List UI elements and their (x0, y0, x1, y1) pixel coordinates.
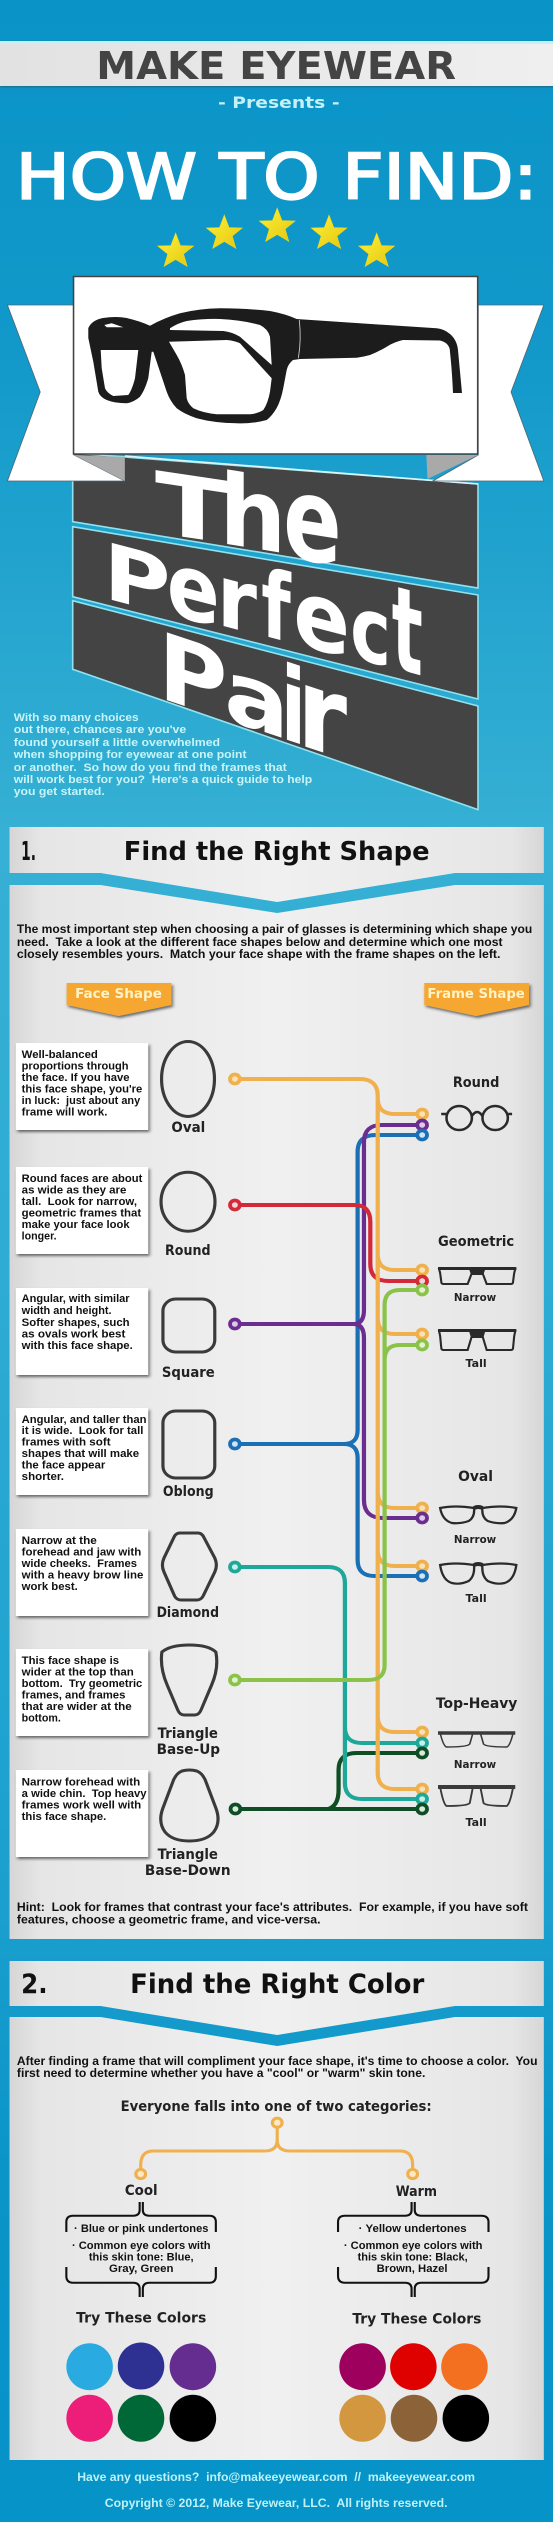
card: diamond description: forehead and jaw with (22, 1547, 141, 1558)
intro text: shape: closely resembles yours. Match your face shape with the frame shapes on the left. (17, 947, 500, 961)
card: triangle base-up description: wider at the top than (21, 1667, 134, 1678)
text: Perfect: t (392, 560, 423, 704)
face shape labels: Oval (171, 1120, 205, 1136)
card: diamond description: with a heavy brow line (21, 1570, 143, 1581)
card: diamond description (16, 1529, 148, 1616)
card: triangle base-up description: bottom. Try geometric (22, 1678, 142, 1690)
connector lines between faces and frames (235, 1079, 422, 1809)
banner: frame shape: Frame Shape (427, 986, 525, 1002)
intro paragraph: you get started. (14, 784, 105, 798)
card: round description: make your face look (22, 1219, 130, 1231)
heading: two categories: Everyone falls into one of two categories: (121, 2099, 432, 2115)
banner: face shape (67, 983, 171, 1016)
text: cool attributes: this skin tone: Blue, (89, 2252, 194, 2263)
text: Perfect: e (167, 530, 220, 649)
panel: find the right shape (10, 885, 544, 1939)
icon: top-heavy tall frames (438, 1787, 515, 1806)
heading: try these colors, cool: Try These Colors (76, 2311, 206, 2327)
card: oblong description: Angular, and taller than (22, 1414, 147, 1426)
face shape labels (145, 1120, 231, 1879)
card: triangle base-up description: bottom. (22, 1713, 61, 1724)
card: oblong description: shapes that will make (22, 1448, 139, 1460)
icon: oval tall frames (440, 1564, 516, 1584)
card: oblong description: the face appear (22, 1460, 106, 1471)
card: oblong description: shorter. (22, 1471, 64, 1483)
intro text: color: After finding a frame that will compliment your face shape, it's time to choose a color. You (17, 2054, 537, 2068)
text: Perfect: c (350, 573, 391, 690)
card: oval description: proportions through (22, 1061, 129, 1072)
card: oval description: the face. If you have (22, 1072, 130, 1084)
text: Pair: i (281, 642, 306, 771)
frame shape labels: Tall (466, 1592, 487, 1605)
text: Pair: a (224, 638, 289, 761)
card: oblong description: frames with soft (22, 1437, 111, 1448)
icon: oval narrow frames (440, 1506, 516, 1523)
brace: warm (338, 2202, 488, 2297)
text: warm attributes: Brown, Hazel (377, 2263, 448, 2275)
title: How to find: HOW TO FIND: (16, 142, 537, 214)
card: triangle base-down description: a wide chin. Top heavy (22, 1788, 147, 1800)
swatches: warm colors (339, 2343, 489, 2442)
card: square description (16, 1288, 148, 1375)
icon: diamond face (162, 1533, 216, 1600)
card: triangle base-up description: frames, and frames (22, 1690, 125, 1701)
card: square description: as ovals work best (22, 1329, 126, 1340)
icon: geometric tall frames (438, 1330, 516, 1350)
frame shape labels: Round (453, 1075, 499, 1091)
card: round description: longer. (22, 1231, 57, 1242)
text: Perfect: r (217, 544, 258, 656)
icon: round face (161, 1172, 215, 1231)
frame shape labels: Oval (458, 1469, 493, 1485)
face shape labels: Triangle (158, 1847, 218, 1863)
card: diamond description: Narrow at the (22, 1535, 97, 1547)
text: warm attributes: · Common eye colors with (344, 2240, 483, 2252)
card: round description: Round faces are about (22, 1173, 143, 1185)
section 1 header (10, 827, 544, 902)
label: warm: Warm (396, 2184, 437, 2200)
frame shape labels: Top-Heavy (436, 1696, 518, 1712)
card: oblong description: it is wide. Look for tall (22, 1425, 143, 1437)
icon: oblong face (163, 1411, 215, 1478)
card: oblong description (16, 1408, 148, 1495)
card: round description: geometric frames that (22, 1208, 141, 1219)
intro text: shape: need. Take a look at the different face shapes below and determine which one most (17, 935, 503, 949)
card: round description (16, 1167, 148, 1254)
connector: categories split (136, 2118, 417, 2179)
card: square description: with this face shape. (21, 1340, 133, 1352)
ribbon behind glasses (7, 305, 544, 481)
text: cool attributes: · Common eye colors with (72, 2240, 211, 2252)
header band: Make Eyewear (0, 41, 553, 89)
banner: face shape: Face Shape (75, 986, 162, 1002)
intro text: shape (17, 922, 532, 961)
card: triangle base-down description: this face shape. (22, 1811, 106, 1823)
panel: find the right color (10, 2017, 544, 2460)
text: Pair: r (297, 639, 347, 787)
text: warm attributes: · Yellow undertones (359, 2223, 467, 2235)
frame shape labels: Tall (466, 1357, 487, 1370)
card: triangle base-up description: This face shape is (22, 1655, 119, 1667)
face shape labels: Diamond (157, 1605, 219, 1621)
icon: geometric narrow frames (438, 1268, 516, 1284)
text: Pair: P (158, 611, 227, 742)
section 2 header (10, 1961, 544, 2035)
icon: black eyeglasses (88, 308, 462, 423)
card: triangle base-up description (16, 1649, 148, 1736)
text: The: h (219, 452, 286, 577)
brace: cool (66, 2202, 216, 2297)
header band: Make Eyewear: MAKE EYEWEAR (96, 45, 456, 89)
card: triangle base-down description (16, 1770, 148, 1857)
icon: top-heavy narrow frames (438, 1733, 515, 1747)
text: cool attributes (72, 2223, 211, 2275)
card: square description: width and height. (21, 1305, 112, 1317)
card: diamond description: wide cheeks. Frames (21, 1558, 137, 1570)
card: triangle base-up description: that are wider at the (22, 1701, 132, 1713)
text: warm attributes: this skin tone: Black, (358, 2252, 468, 2263)
card: round description: as wide as they are (22, 1185, 126, 1196)
section 2 header: 2. (21, 1968, 48, 2000)
icon: triangle base-up face (161, 1645, 217, 1715)
text: Pair (158, 611, 347, 787)
intro paragraph (13, 710, 312, 798)
icon: five stars (158, 208, 395, 266)
card: oval description: this face shape, you're (22, 1084, 142, 1095)
card: oval description: in luck: just about any (22, 1095, 141, 1107)
frame shape labels: Narrow (454, 1291, 496, 1304)
frame shape labels: Narrow (454, 1533, 496, 1546)
hint text: features, choose a geometric frame, and vice-versa. (17, 1913, 321, 1926)
frame shape labels: Geometric (438, 1234, 514, 1250)
icon: triangle base-down face (161, 1770, 218, 1841)
swatches: cool colors (66, 2342, 216, 2442)
hint text: Hint: Look for frames that contrast your face's attributes. For example, if you have soft (17, 1900, 528, 1914)
intro text: color: first need to determine whether you have a "cool" or "warm" skin tone. (17, 2066, 425, 2080)
face shape labels: Oblong (163, 1484, 214, 1500)
text: cool attributes: · Blue or pink undertones (74, 2223, 208, 2235)
intro text: shape: The most important step when choosing a pair of glasses is determining which shape you (17, 922, 532, 936)
icon: square face (163, 1299, 215, 1352)
intro paragraph: will work best for you? Here's a quick guide to help (13, 772, 312, 786)
presents line: - Presents - (218, 93, 340, 112)
icon: oval face (162, 1042, 214, 1116)
face shape labels: Base-Up (157, 1742, 220, 1758)
face shape labels: Triangle (158, 1726, 218, 1742)
card: square description: Angular, with similar (22, 1293, 130, 1305)
frame shape labels: Tall (466, 1816, 487, 1829)
card: oval description (16, 1043, 148, 1130)
intro paragraph: when shopping for eyewear at one point (13, 747, 247, 761)
icon: round frames (441, 1106, 512, 1130)
face outlines and labels (161, 1042, 218, 1841)
panel: The Perfect Pair slanted panels (73, 449, 478, 810)
card: triangle base-down description: Narrow forehead with (22, 1777, 140, 1788)
footer contact line: Have any questions? info@makeeyewear.com // makeeyewear.com (77, 2470, 475, 2484)
card: triangle base-down description: frames work well with (22, 1800, 141, 1811)
intro paragraph: out there, chances are you've (14, 722, 187, 736)
banner: frame shape (424, 983, 529, 1016)
intro paragraph: or another. So how do you find the frames that (14, 760, 287, 774)
text: cool attributes: Gray, Green (109, 2263, 174, 2275)
intro text: color (17, 2054, 537, 2080)
label: cool: Cool (125, 2183, 158, 2199)
text: Perfect: e (293, 556, 350, 681)
text: The: e (283, 449, 342, 594)
section 2 header: Find the Right Color (130, 1968, 425, 2000)
frame shape labels (436, 1075, 518, 1829)
section 1 header: Find the Right Shape (124, 837, 430, 867)
face shape labels: Round (165, 1243, 211, 1259)
card: square description: Softer shapes, such (22, 1317, 130, 1329)
intro paragraph: With so many choices (14, 710, 139, 724)
text: The (155, 449, 342, 594)
section 1 header: 1. (21, 837, 36, 867)
footer copyright: Copyright © 2012, Make Eyewear, LLC. All rights reserved. (105, 2496, 448, 2510)
glasses photo box (74, 276, 478, 454)
text: Perfect: f (261, 549, 292, 666)
card: round description: tall. Look for narrow, (22, 1196, 137, 1208)
frame shape labels: Narrow (454, 1758, 496, 1771)
text: Perfect (103, 526, 423, 704)
intro paragraph: found yourself a little overwhelmed (14, 735, 220, 749)
text: Perfect: P (103, 526, 171, 634)
text: warm attributes (344, 2223, 483, 2275)
hint text (17, 1900, 528, 1926)
heading: try these colors, warm: Try These Colors (352, 2312, 481, 2327)
card: oval description: Well-balanced (22, 1049, 98, 1061)
text: The: T (155, 454, 230, 565)
face shape labels: Square (162, 1365, 215, 1381)
card: diamond description: work best. (21, 1581, 78, 1593)
connector nodes (230, 1074, 427, 1814)
face shape labels: Base-Down (145, 1863, 231, 1879)
card: oval description: frame will work. (22, 1107, 107, 1118)
